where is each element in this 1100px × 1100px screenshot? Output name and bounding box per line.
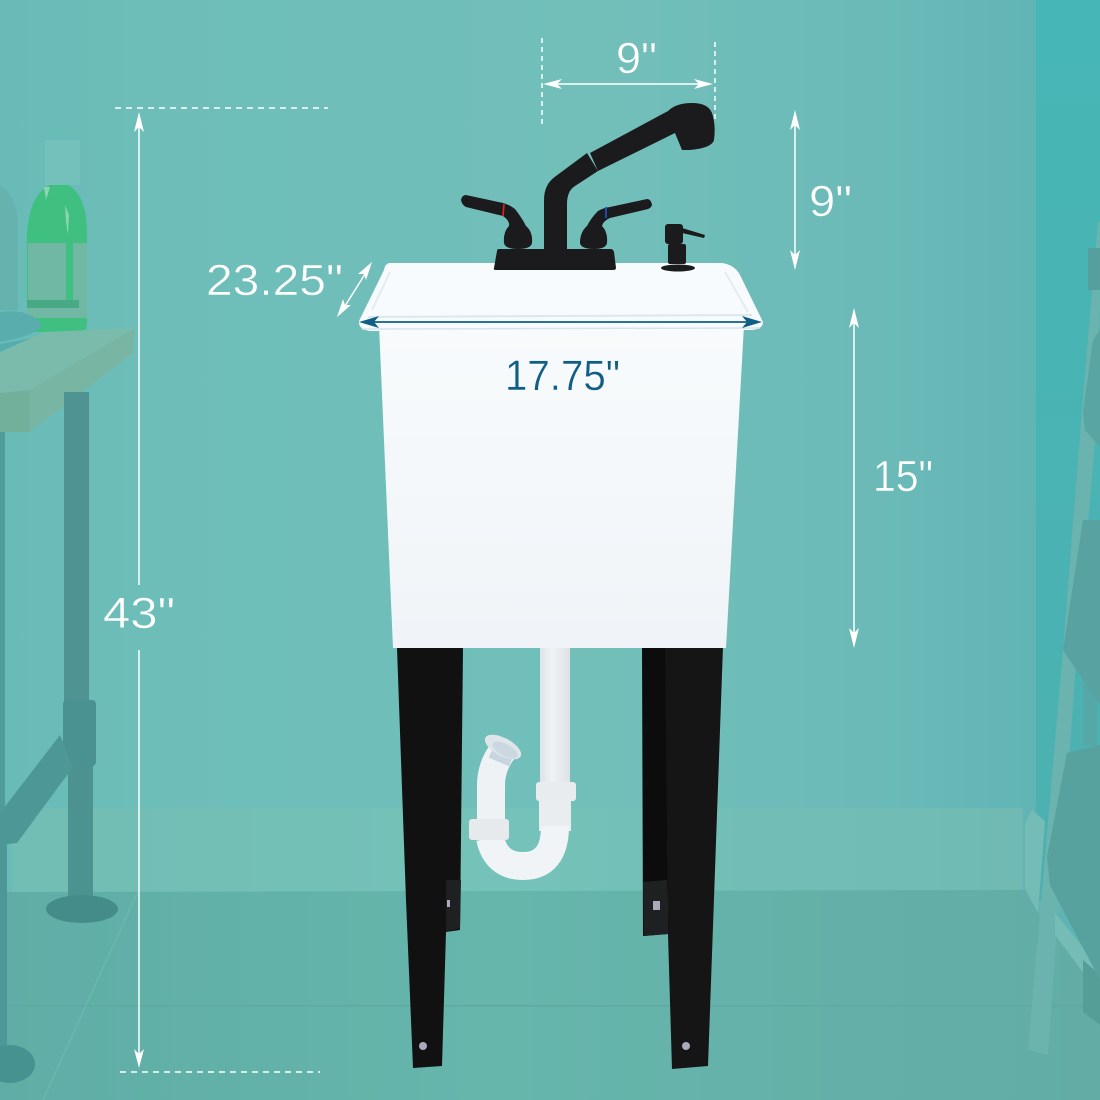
label: depth: 23.25" bbox=[206, 256, 343, 305]
spout bbox=[544, 153, 598, 250]
glass jar bbox=[0, 185, 18, 310]
leg: right bbox=[642, 646, 723, 1069]
faucet base bbox=[494, 249, 616, 270]
arrow: 43 inch lower bbox=[138, 650, 140, 1064]
arrowheads bbox=[134, 79, 859, 1068]
table legs bbox=[0, 432, 5, 822]
label: tub width: 17.75" bbox=[505, 352, 620, 400]
tub body bbox=[379, 325, 744, 648]
label: tub height: 15" bbox=[873, 452, 933, 501]
bottle bbox=[27, 140, 87, 332]
arrow: tub height bbox=[853, 314, 855, 642]
soap dispenser bbox=[665, 224, 683, 244]
handle colour bands bbox=[503, 204, 504, 216]
arrow: depth bbox=[340, 266, 370, 314]
arrow: faucet height bbox=[794, 116, 796, 264]
background ladder bbox=[1028, 222, 1100, 1055]
right handle bbox=[580, 199, 652, 249]
label: faucet width: 9" bbox=[616, 34, 657, 83]
arrow: tub width bbox=[359, 316, 762, 328]
left handle bbox=[461, 195, 532, 249]
leg: left bbox=[397, 648, 463, 1068]
label: faucet height: 9" bbox=[809, 177, 852, 226]
background shelf with bottle bbox=[0, 140, 135, 1083]
arrow: faucet width bbox=[548, 83, 708, 85]
towels bbox=[0, 311, 42, 342]
dimension lines bbox=[115, 38, 854, 1072]
table top bbox=[0, 328, 135, 393]
sprayer head bbox=[590, 103, 715, 171]
arrow: 43 inch upper bbox=[138, 116, 140, 585]
sink bbox=[359, 103, 763, 1069]
faucet bbox=[461, 103, 715, 272]
drain pipe bbox=[469, 640, 576, 866]
tub rim bbox=[359, 263, 763, 331]
label: total height: 43" bbox=[103, 589, 175, 638]
